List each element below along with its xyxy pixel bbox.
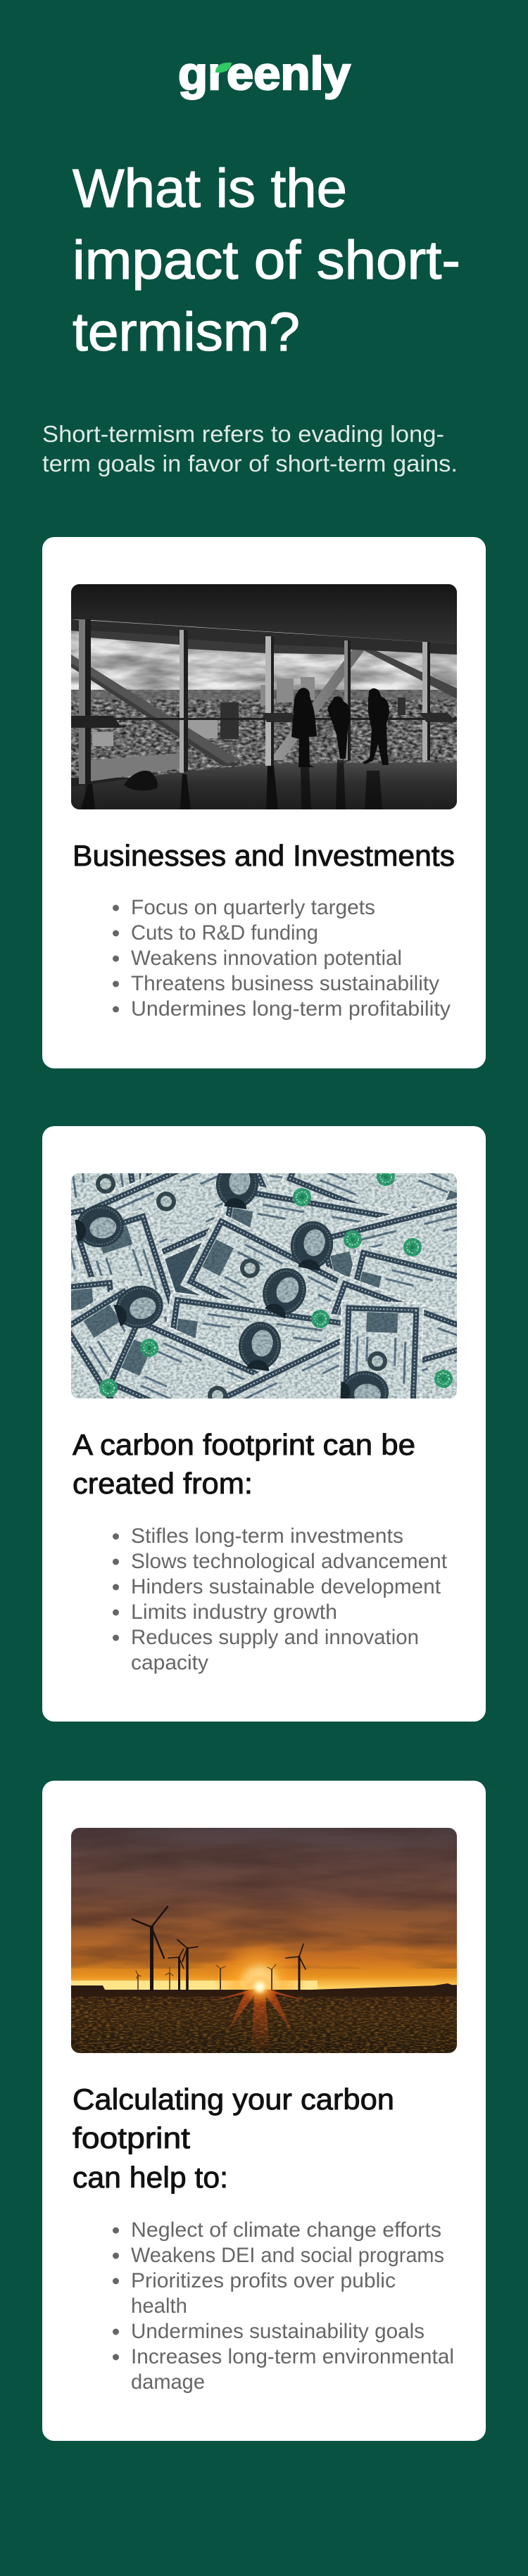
bullet list: Slows technological advancement (131, 1550, 448, 1573)
bullet list: Weakens innovation potential (131, 947, 402, 970)
bullet list: Neglect of climate change efforts (131, 2218, 441, 2242)
bullet list: health (131, 2294, 187, 2318)
bullet list: Focus on quarterly targets (131, 896, 375, 919)
intro text: Short-termism refers to evading long- (42, 421, 444, 447)
intro text: term goals in favor of short-term gains. (42, 450, 458, 476)
bullet list: Prioritizes profits over public (131, 2269, 396, 2292)
bullet list: capacity (131, 1651, 208, 1674)
title (73, 158, 460, 362)
photo: wind turbines at sunset (71, 1828, 457, 2053)
bullet list: Hinders sustainable development (131, 1575, 441, 1598)
bullet list: Stifles long-term investments (131, 1524, 403, 1548)
bullet list (113, 2218, 454, 2394)
panel: calculating your carbon footprint (42, 1781, 486, 2441)
bullet list (113, 896, 451, 1021)
bullet list: Increases long-term environmental (131, 2345, 454, 2368)
figures (291, 688, 389, 809)
panel: carbon footprint sources (42, 1126, 486, 1722)
title: What is the (73, 158, 347, 219)
bullet list: Weakens DEI and social programs (131, 2244, 444, 2267)
logo: greenly: greenly (178, 47, 351, 99)
bullet list: Cuts to R&D funding (131, 921, 318, 945)
heading: created from: (73, 1467, 253, 1500)
photo: silhouettes in a high-rise office (71, 584, 457, 809)
heading: Businesses and Investments (73, 839, 455, 872)
bullet list (113, 1524, 448, 1674)
icon: green leaf on the r (215, 63, 232, 72)
heading: A carbon footprint can be (73, 1428, 415, 1461)
heading: footprint (73, 2121, 190, 2154)
bullet list: damage (131, 2370, 205, 2394)
heading: Calculating your carbon (73, 2083, 394, 2116)
heading (73, 2083, 394, 2194)
panel: businesses and investments (42, 537, 486, 1068)
heading: can help to: (73, 2161, 228, 2194)
bullet list: Reduces supply and innovation (131, 1626, 419, 1649)
bullet list: Undermines long-term profitability (131, 997, 451, 1021)
bullet list: Threatens business sustainability (131, 972, 439, 995)
intro text (42, 421, 458, 476)
title: termism? (73, 302, 300, 362)
heading (73, 1428, 415, 1500)
photo: scattered dollar bills (71, 1173, 457, 1399)
turbines (132, 1907, 306, 1990)
bullet list: Undermines sustainability goals (131, 2320, 425, 2343)
title: impact of short- (73, 230, 460, 291)
bullet list: Limits industry growth (131, 1600, 337, 1624)
